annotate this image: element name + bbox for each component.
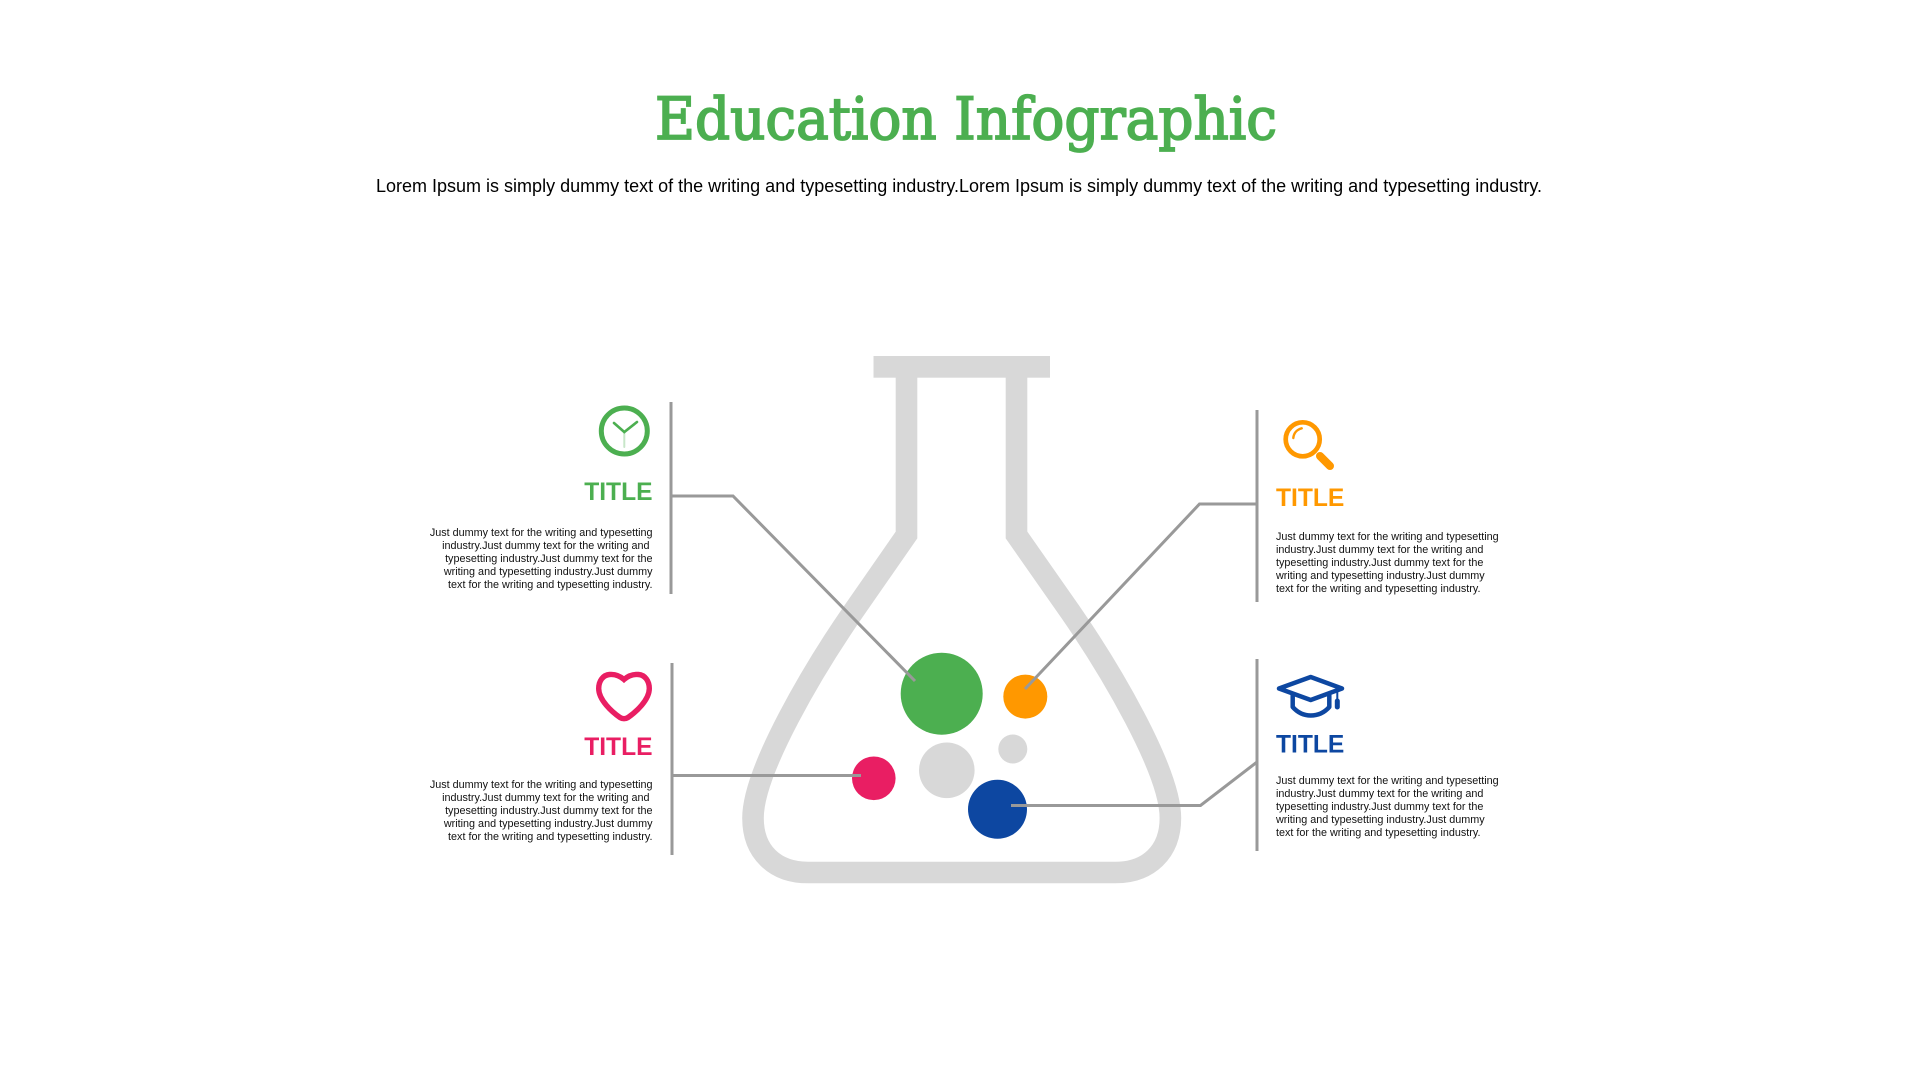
text block: typesetting industry.Just dummy text for the: [445, 805, 652, 817]
text block: typesetting industry.Just dummy text for the: [1276, 557, 1483, 569]
flask illustration: [753, 356, 1170, 872]
flask body outline: [753, 370, 1170, 872]
text block: writing and typesetting industry.Just dummy: [443, 818, 653, 830]
heading: TITLE: [1276, 485, 1344, 512]
text block: Just dummy text for the writing and typesetting: [1276, 531, 1499, 543]
panel: top right: [1275, 422, 1499, 595]
text block: writing and typesetting industry.Just dummy: [443, 566, 653, 578]
text block: typesetting industry.Just dummy text for the: [445, 553, 652, 565]
text block: text for the writing and typesetting industry.: [448, 831, 652, 843]
panel: bottom left: [430, 674, 653, 843]
text block: industry.Just dummy text for the writing and: [1276, 788, 1483, 800]
bubble: pink: [852, 756, 896, 800]
text block: text for the writing and typesetting industry.: [448, 579, 652, 591]
text block: Just dummy text for the writing and typesetting: [430, 527, 652, 539]
text block: industry.Just dummy text for the writing and: [442, 540, 650, 552]
flask cap: [874, 356, 1050, 378]
text block: writing and typesetting industry.Just dummy: [1275, 570, 1485, 582]
text block: industry.Just dummy text for the writing and: [442, 792, 650, 804]
text block: [430, 527, 653, 591]
bubble: grey small: [998, 734, 1027, 764]
heading: TITLE: [584, 734, 652, 761]
icon: heart: [599, 674, 649, 719]
panel: top left: [430, 408, 653, 591]
connector: orange: [1025, 410, 1257, 689]
panel: bottom right: [1275, 677, 1499, 839]
heading: TITLE: [1276, 732, 1344, 759]
subtitle: Lorem Ipsum is simply dummy text of the writing and typesetting industry.Lorem Ipsum is simply dummy text of the writing and typesetting industry.: [376, 176, 1542, 196]
text block: [430, 779, 653, 843]
text block: Just dummy text for the writing and typesetting: [1276, 775, 1499, 787]
bubble: grey large: [919, 742, 975, 798]
connector: pink: [672, 663, 861, 855]
icon: clock: [601, 408, 647, 454]
bubble: orange: [1003, 675, 1047, 719]
bubble: blue: [968, 780, 1027, 839]
text block: industry.Just dummy text for the writing and: [1276, 544, 1483, 556]
text block: Just dummy text for the writing and typesetting: [430, 779, 652, 791]
heading: TITLE: [584, 479, 652, 506]
text block: text for the writing and typesetting industry.: [1276, 827, 1480, 839]
icon: graduation cap: [1279, 677, 1342, 716]
text block: typesetting industry.Just dummy text for the: [1276, 801, 1483, 813]
text block: writing and typesetting industry.Just dummy: [1275, 814, 1485, 826]
connector: green: [671, 402, 915, 681]
bubble: green: [901, 653, 983, 735]
title: Education Infographic: [655, 85, 1277, 153]
text block: [1275, 531, 1499, 595]
text block: text for the writing and typesetting industry.: [1276, 583, 1480, 595]
text block: [1275, 775, 1499, 839]
icon: magnifier: [1286, 422, 1330, 466]
connector: blue: [1011, 659, 1257, 851]
